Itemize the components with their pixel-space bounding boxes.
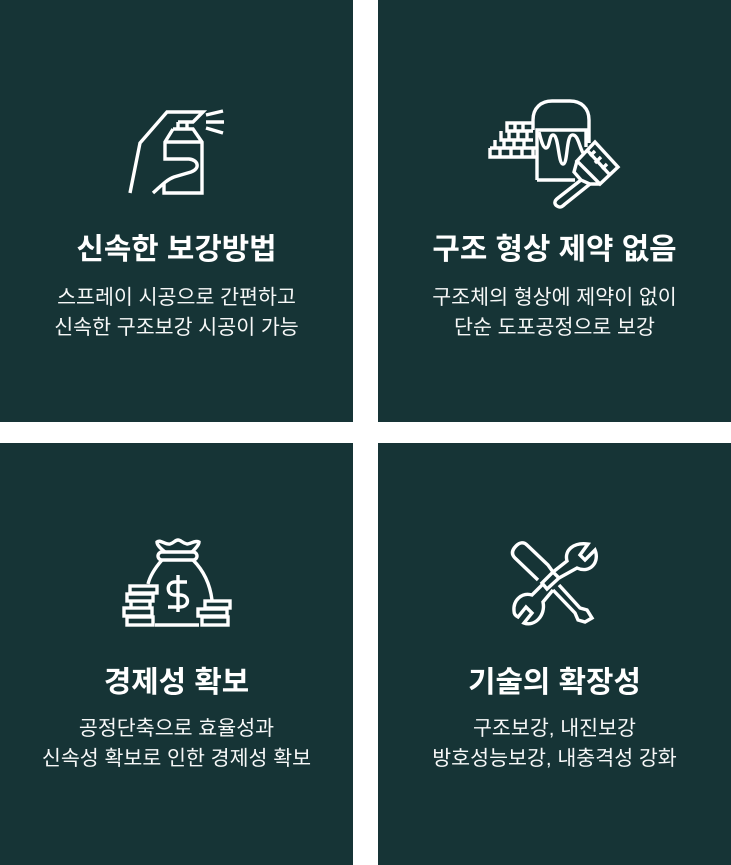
heading: 경제성 확보: [104, 666, 249, 699]
description: [42, 717, 311, 770]
description: [432, 717, 677, 770]
icon: spray can in hand: [128, 109, 224, 195]
panel: no shape limits: [378, 0, 731, 422]
description: 신속성 확보로 인한 경제성 확보: [42, 747, 311, 770]
icon: money bag and coins: [122, 538, 232, 627]
heading: 기술의 확장성: [468, 666, 641, 699]
heading: 신속한 보강방법: [76, 233, 277, 266]
description: 방호성능보강, 내충격성 강화: [432, 747, 677, 770]
heading: 구조 형상 제약 없음: [432, 233, 677, 266]
description: 구조보강, 내진보강: [473, 717, 636, 740]
description: 구조체의 형상에 제약이 없이: [432, 286, 677, 309]
description: 공정단축으로 효율성과: [79, 717, 274, 740]
description: [432, 286, 677, 339]
panel: rapid reinforcement: [0, 0, 353, 422]
description: 단순 도포공정으로 보강: [454, 316, 655, 339]
panel: economy: [0, 443, 353, 865]
description: 스프레이 시공으로 간편하고: [57, 286, 296, 309]
description: 신속한 구조보강 시공이 가능: [54, 316, 299, 339]
icon: paint bucket, bricks and brush: [488, 99, 620, 209]
description: [54, 286, 299, 339]
panel: technical scalability: [378, 443, 731, 865]
